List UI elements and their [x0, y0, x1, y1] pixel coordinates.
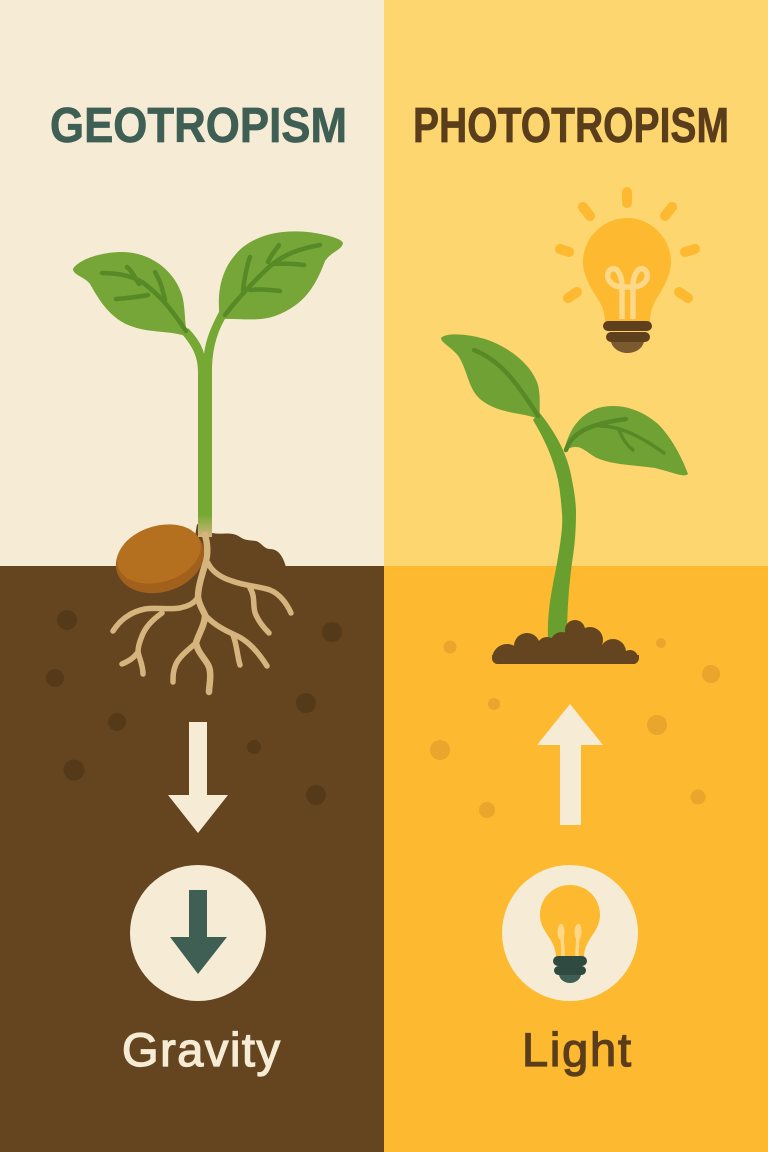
heading: geotropism: GEOTROPISM: [50, 99, 347, 153]
icon: light bulb with rays: [560, 192, 695, 353]
panel background: air: [0, 0, 384, 567]
right leaf: [219, 231, 343, 319]
leaf veins: [474, 350, 664, 453]
icon: light circle: [502, 865, 638, 1001]
panel background: soil: [0, 566, 384, 1152]
arrow: upward: [537, 704, 603, 825]
soil mound: [190, 524, 286, 567]
rays: [560, 192, 695, 298]
stem base fade: [198, 505, 212, 537]
soil mound: [492, 620, 639, 664]
filament: [608, 269, 647, 319]
seedling with roots: [73, 231, 343, 692]
left leaf: [73, 252, 188, 337]
arrow: downward: [168, 722, 228, 833]
ground particles: [430, 638, 720, 818]
panel background: ground: [384, 566, 768, 1152]
leaf veins: [102, 245, 320, 331]
label: gravity: Gravity: [122, 1023, 280, 1076]
stem: [182, 310, 228, 512]
icon: down arrow: [170, 890, 227, 974]
panel: geotropism: [0, 0, 384, 1152]
icon: small bulb: [540, 885, 600, 983]
stem: [533, 412, 576, 640]
icon: gravity circle: [130, 865, 266, 1001]
roots: [113, 535, 291, 692]
lower leaf: [564, 406, 688, 475]
panel background: light: [384, 0, 768, 567]
soil particles: [46, 610, 342, 805]
seed: [107, 514, 213, 604]
bulb base: [603, 321, 652, 353]
upper leaf: [441, 334, 540, 419]
panel: phototropism: [384, 0, 768, 1152]
seedling bending to light: [441, 334, 688, 674]
bulb glass: [583, 218, 671, 322]
label: light: Light: [522, 1023, 631, 1076]
